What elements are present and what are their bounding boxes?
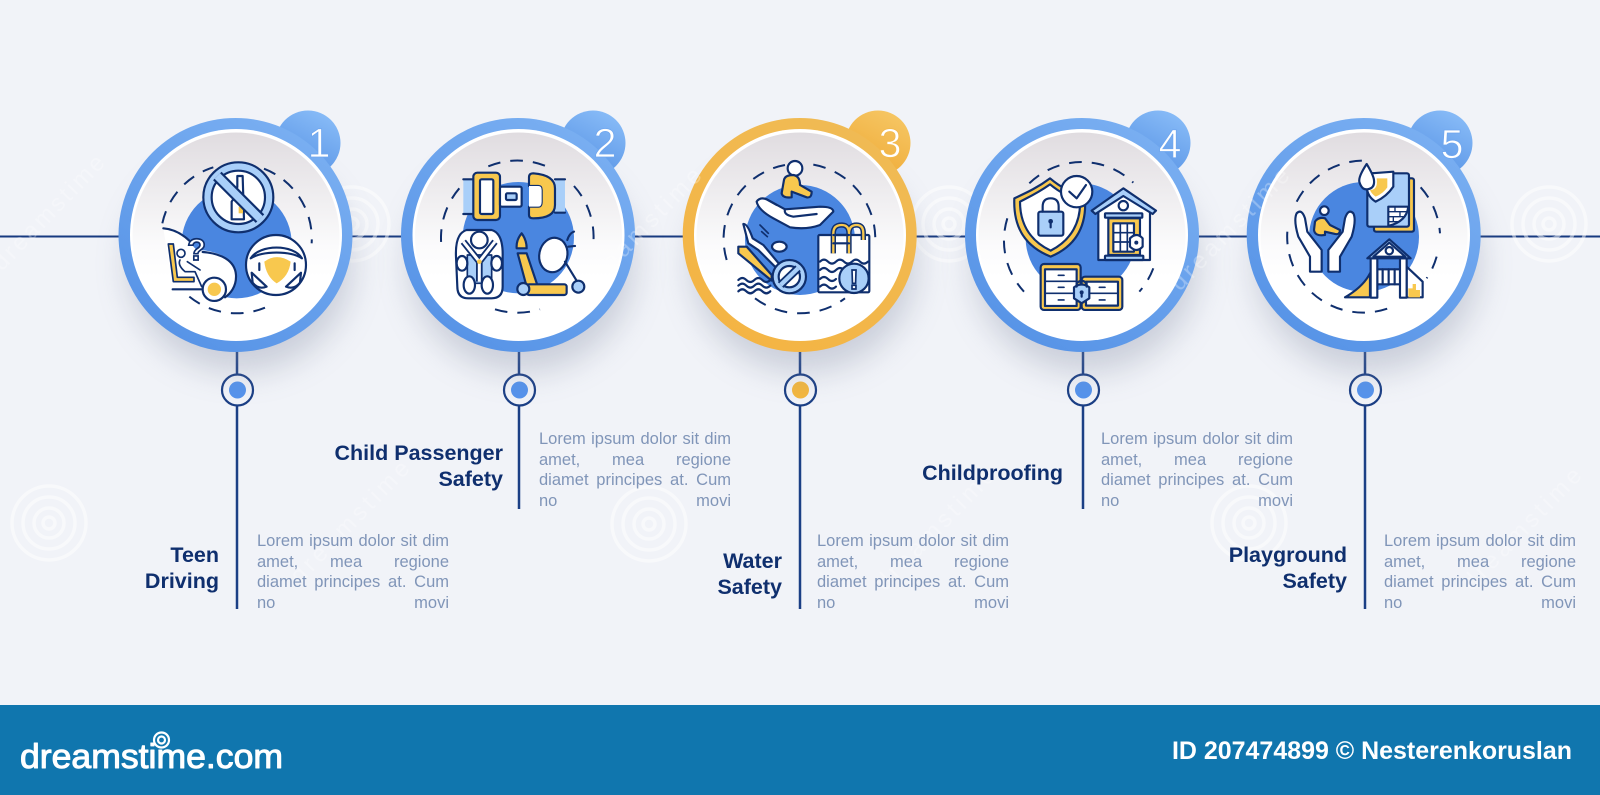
text: playground safety body: Lorem ipsum dolor sit dim [1384, 532, 1576, 550]
heading: childproofing: Childproofing [922, 461, 1063, 485]
panel: step 4 childproofing circle: 4 [1159, 121, 1181, 167]
text: teen driving body [257, 532, 449, 612]
heading: water safety: Water [723, 549, 782, 573]
text: child passenger body: diamet principes at. Cum [539, 471, 731, 489]
icon: water safety [724, 161, 875, 313]
panel: step 3 water safety circle [683, 110, 917, 372]
heading: child passenger safety [335, 441, 503, 491]
diagonal watermark text: dreamstime [285, 455, 415, 589]
icon: teen driving [162, 162, 312, 313]
diagonal watermark text: dreamstime [577, 162, 707, 296]
footer credit: ID 207474899 © Nesterenkoruslan [1172, 737, 1572, 765]
text: playground safety body [1384, 532, 1576, 612]
text: child passenger body: no movi [539, 492, 731, 510]
watermark spirals [12, 187, 1586, 561]
stem lines and markers [222, 350, 1381, 609]
text: childproofing body: Lorem ipsum dolor sit dim [1101, 430, 1293, 448]
diagonal watermark text [0, 150, 1587, 596]
text: childproofing body: diamet principes at. Cum [1101, 471, 1293, 489]
text: playground safety body: amet, mea regione [1384, 553, 1576, 571]
icon: seat belt and child seat [441, 161, 594, 313]
heading: teen driving: Driving [145, 569, 219, 593]
text: childproofing body [1101, 430, 1293, 510]
text: teen driving body: Lorem ipsum dolor sit dim [257, 532, 449, 550]
footer logo: dreamstime.com [20, 738, 283, 776]
text: water safety body: no movi [817, 594, 1009, 612]
timeline line [0, 236, 1600, 238]
icon: playground safety [1287, 161, 1440, 313]
panel: step 3 water safety circle: 3 [879, 120, 901, 166]
heading: water safety: Safety [717, 575, 782, 599]
text: child passenger body: amet, mea regione [539, 451, 731, 469]
heading: teen driving [145, 373, 1354, 593]
text: playground safety body: no movi [1384, 594, 1576, 612]
text: childproofing body: amet, mea regione [1101, 451, 1293, 469]
heading: water safety [717, 549, 782, 599]
heading: teen driving: Teen [170, 543, 219, 567]
panel: step 1 teen driving circle [118, 110, 352, 372]
panel: step 1 teen driving circle: 1 [308, 120, 330, 166]
text: teen driving body: amet, mea regione [257, 553, 449, 571]
text: teen driving body: no movi [257, 594, 449, 612]
text: water safety body [817, 532, 1009, 612]
panel: step 2 child passenger safety circle: 2 [594, 120, 616, 166]
heading: playground safety [1229, 543, 1347, 593]
heading: playground safety: Playground [1229, 543, 1347, 567]
text: water safety body: Lorem ipsum dolor sit dim [817, 532, 1009, 550]
heading: child passenger safety: Child Passenger [335, 441, 503, 465]
icon: water safety: ! [849, 264, 859, 295]
heading: child passenger safety: Safety [438, 467, 503, 491]
text: playground safety body: diamet principes at. Cum [1384, 573, 1576, 591]
panel: step 5 playground safety circle: 5 [1441, 121, 1463, 167]
panel: step 2 child passenger safety circle [401, 110, 635, 372]
footer band [0, 705, 1600, 795]
diagonal watermark text: dreamstime [870, 462, 1000, 596]
heading: playground safety: Safety [1282, 569, 1347, 593]
text: teen driving body: diamet principes at. Cum [257, 573, 449, 591]
icon: childproofing [1004, 162, 1156, 310]
panel: step 4 childproofing circle [965, 110, 1199, 372]
panel: step 5 playground safety circle [1247, 110, 1481, 372]
text: water safety body: diamet principes at. Cum [817, 573, 1009, 591]
diagonal watermark text: dreamstime [1457, 462, 1587, 596]
text: child passenger body [539, 430, 731, 510]
text: childproofing body: no movi [1101, 492, 1293, 510]
text: child passenger body: Lorem ipsum dolor sit dim [539, 430, 731, 448]
icon: teen driving: ? [187, 233, 206, 267]
text: water safety body: amet, mea regione [817, 553, 1009, 571]
diagonal watermark text: dreamstime [1165, 162, 1295, 296]
